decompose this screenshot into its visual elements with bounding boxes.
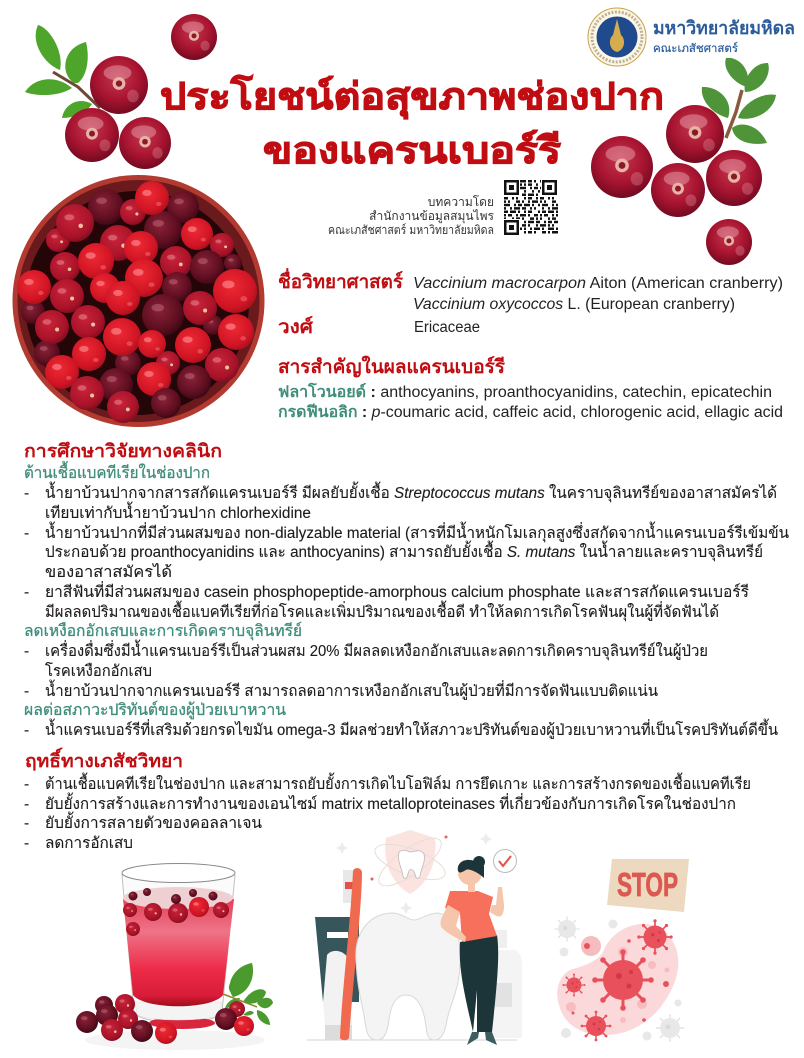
antibacterial bullets: ของอาสาสมัครได้: [45, 563, 172, 581]
grey viruses: [554, 916, 684, 1042]
antibacterial bullets: น้ำยาบ้วนปากจากสารสกัดแครนเบอร์รี มีผลยับยั้งเชื้อ Streptococcus mutans ในคราบจุลินทรีย์ของอาสาสมัครได้: [45, 481, 777, 503]
red dots: [572, 939, 669, 1022]
icon: berry: [591, 136, 653, 198]
antibacterial bullets: ยาสีฟันที่มีส่วนผสมของ casein phosphopeptide-amorphous calcium phosphate และสารสกัดแครนเบอร์รี: [45, 581, 749, 601]
large tooth: [356, 913, 460, 1040]
baseline: [307, 1039, 517, 1041]
top left cranberries with leaves: [25, 14, 217, 169]
pharmacology bullets: -: [24, 796, 29, 813]
toothpaste tube: [315, 917, 359, 1040]
pharmacology bullets: [24, 772, 751, 852]
credit text: บทความโดย: [428, 195, 494, 209]
pharmacology bullets: -: [24, 776, 29, 793]
title: ของแครนเบอร์รี: [263, 130, 561, 171]
pharmacology bullets: ต้านเชื้อแบคทีเรียในช่องปาก และสามารถยับยั้งการเกิดไบโอฟิล์ม การยึดเกาะ และการสร้างกรดของเชื้อแบคทีเรีย: [45, 772, 751, 793]
pharmacology bullets: -: [24, 815, 29, 832]
phenolic acids line: กรดฟีนอลิก : p-coumaric acid, caffeic acid, chlorogenic acid, ellagic acid: [278, 403, 783, 421]
decorative stars: [336, 833, 492, 914]
top right cranberries with leaves: [591, 58, 776, 265]
icon: stem: [726, 90, 742, 138]
pink blob: [557, 924, 678, 1035]
illustration: stop bacteria: [554, 859, 689, 1042]
antibacterial bullets: -: [24, 485, 29, 502]
toothbrush: [340, 868, 362, 1040]
icon: berry: [706, 150, 762, 206]
logo: Mahidol University seal: [588, 8, 646, 66]
icon: berry: [706, 219, 752, 265]
QR code: [503, 179, 559, 236]
antibacterial bullets: น้ำยาบ้วนปากที่มีส่วนผสมของ non-dialyzable material (สารที่มีน้ำหนักโมเลกุลสูงซึ่งสกัดจากน้ำแครนเบอร์รีเข้มข้น: [45, 521, 789, 543]
title: [160, 74, 664, 171]
stop label: STOP: [617, 866, 678, 903]
gingivitis bullets: [24, 639, 708, 701]
glass body: [122, 875, 235, 1022]
icon: stem: [53, 72, 100, 108]
stem: [223, 994, 257, 1007]
icon: berry: [651, 163, 705, 217]
icon: berry: [65, 108, 119, 162]
credit text: คณะเภสัชศาสตร์ มหาวิทยาลัยมหิดล: [328, 223, 494, 237]
subheading: diabetic periodontal: ผลต่อสภาวะปริทันต์ของผู้ป่วยเบาหวาน: [24, 700, 286, 720]
scientific names: [413, 275, 783, 313]
icon: leaves: [25, 25, 92, 118]
antibacterial bullets: -: [24, 584, 29, 601]
gingivitis bullets: เครื่องดื่มซึ่งมีน้ำแครนเบอร์รีเป็นส่วนผสม 20% มีผลลดเหงือกอักเสบและลดการเกิดคราบจุลินทรีย์ในผู้ป่วย: [45, 639, 708, 661]
icon: berry: [90, 56, 148, 114]
woman: [441, 856, 504, 1045]
foam: [123, 887, 233, 909]
pink shield with tooth: [371, 830, 449, 894]
red dots: [370, 836, 448, 880]
stop sign: [607, 859, 689, 912]
scientific names: Vaccinium oxycoccos L. (European cranberry): [413, 296, 735, 313]
icon: leaves: [702, 58, 776, 144]
scientific names: Vaccinium macrocarpon Aiton (American cranberry): [413, 275, 783, 292]
subheading: antibacterial: ต้านเชื้อแบคทีเรียในช่องปาก: [24, 461, 210, 482]
heading: family: วงศ์: [278, 316, 314, 338]
rim: [122, 864, 235, 882]
logo text: university name: คณะเภสัชศาสตร์: [653, 41, 738, 55]
gingivitis bullets: -: [24, 643, 29, 660]
juice: [123, 899, 234, 1006]
floating berries: [123, 888, 229, 936]
pharmacology bullets: ยับยั้งการสลายตัวของคอลลาเจน: [45, 811, 262, 832]
table reflection: [85, 1030, 265, 1050]
gingivitis bullets: น้ำยาบ้วนปากจากแครนเบอร์รี สามารถลดอาการเหงือกอักเสบในผู้ป่วยที่มีการจัดฟันแบบติดแน่น: [45, 679, 658, 701]
icon: berry: [666, 105, 724, 163]
heading: clinical studies: การศึกษาวิจัยทางคลินิก: [24, 441, 222, 461]
bowl of cranberries: [12, 175, 264, 427]
mouthwash bottle: [490, 930, 522, 1038]
heading: scientific name: ชื่อวิทยาศาสตร์: [278, 268, 404, 293]
credit text: สำนักงานข้อมูลสมุนไพร: [369, 209, 495, 224]
pink dots: [566, 936, 670, 1023]
check bubble: [494, 850, 516, 872]
gingivitis bullets: -: [24, 683, 29, 700]
illustration: tooth, toothbrush and woman: [307, 830, 522, 1045]
flavonoids line: ฟลาโวนอยด์ : anthocyanins, proanthocyanidins, catechin, epicatechin: [278, 382, 772, 401]
pharmacology bullets: -: [24, 835, 29, 852]
logo text: university name: [653, 18, 795, 55]
title: ประโยชน์ต่อสุขภาพช่องปาก: [160, 74, 664, 120]
clear base: [135, 1002, 222, 1020]
antibacterial bullets: ประกอบด้วย proanthocyanidins และ anthocyanins) สามารถยับยั้งเชื้อ S. mutans ในน้ำลายและคราบจุลินทรีย์: [45, 540, 763, 562]
subheading: gingivitis and plaque: ลดเหงือกอักเสบและการเกิดคราบจุลินทรีย์: [24, 621, 302, 641]
family name: Ericaceae: [414, 319, 480, 336]
antibacterial bullets: -: [24, 525, 29, 542]
diabetic bullet: -: [24, 722, 29, 739]
diabetic bullet: น้ำแครนเบอร์รีที่เสริมด้วยกรดไขมัน omega-3 มีผลช่วยทำให้สภาวะปริทันต์ของผู้ป่วยเบาหวานที่เป็นโรคปริทันต์ดีขึ้น: [45, 718, 778, 740]
leaves: [225, 963, 273, 1025]
heading: key compounds: สารสำคัญในผลแครนเบอร์รี: [278, 355, 506, 378]
antibacterial bullets: เทียบเท่ากับน้ำยาบ้วนปาก chlorhexidine: [45, 501, 311, 522]
icon: berry: [119, 117, 171, 169]
credit text: [328, 195, 495, 237]
red viruses: [562, 919, 673, 1041]
berries: [76, 994, 254, 1044]
logo text: university name: มหาวิทยาลัยมหิดล: [653, 18, 795, 38]
antibacterial bullets: [24, 481, 789, 622]
red base reflection: [149, 1017, 215, 1029]
antibacterial bullets: มีผลลดปริมาณของเชื้อแบคทีเรียที่ก่อโรคและเพิ่มปริมาณของเชื้อดี ทำให้ลดการเกิดโรคฟันผุในผู้ที่จัดฟันได้: [45, 600, 719, 622]
illustration: glass of cranberry juice: [76, 864, 273, 1050]
gingivitis bullets: โรคเหงือกอักเสบ: [45, 662, 152, 680]
icon: berry: [171, 14, 217, 60]
pharmacology bullets: ลดการอักเสบ: [45, 835, 133, 852]
heading: pharmacological activity: ฤทธิ์ทางเภสัชวิทยา: [25, 747, 183, 771]
pharmacology bullets: ยับยั้งการสร้างและการทำงานของเอนไซม์ matrix metalloproteinases ที่เกี่ยวข้องกับการเกิดโรคในช่องปาก: [45, 792, 736, 813]
